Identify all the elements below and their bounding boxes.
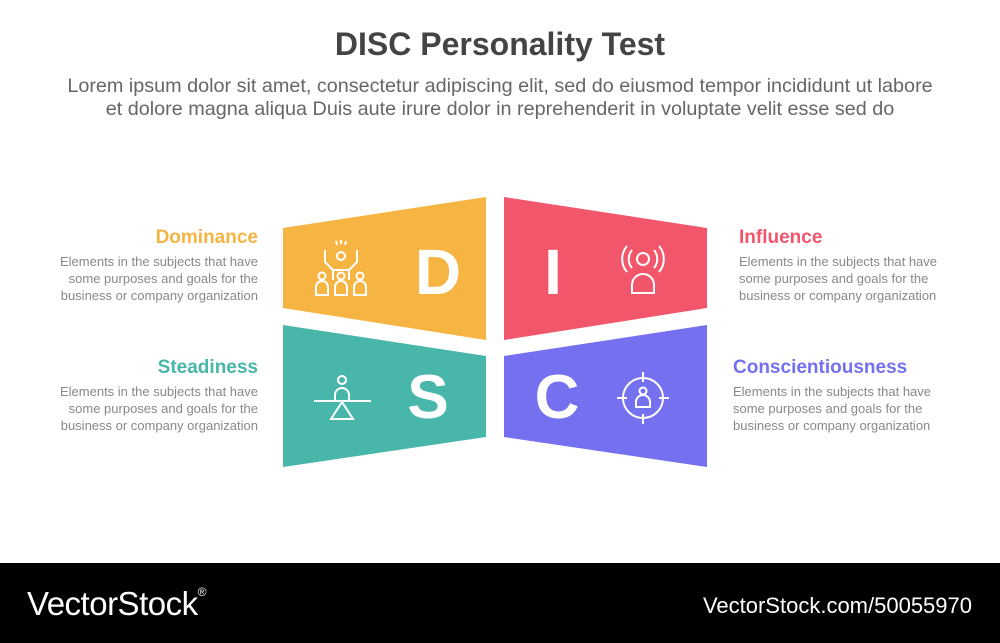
panel I: [504, 197, 707, 340]
panel S: [283, 325, 486, 467]
icon: balance: [314, 376, 371, 419]
text: dominance: some purposes and goals for the: [69, 271, 258, 286]
footer bar: [0, 563, 1000, 643]
text: steadiness: [60, 357, 258, 433]
text: conscientiousness: business or company organization: [733, 418, 930, 433]
panel C: C: [535, 363, 579, 432]
text: conscientiousness: [733, 357, 931, 433]
text: dominance: Elements in the subjects that have: [60, 254, 258, 269]
footer url: VectorStock.com/50055970: [703, 593, 972, 618]
text: dominance: business or company organization: [61, 288, 258, 303]
panel I: I: [544, 236, 562, 308]
subtitle: Lorem ipsum dolor sit amet, consectetur adipiscing elit, sed do eiusmod tempor incididunt ut labore: [67, 75, 933, 97]
panel C: [504, 325, 707, 467]
subtitle: et dolore magna aliqua Duis aute irure dolor in reprehenderit in voluptate velit esse sed do: [106, 98, 894, 120]
panel S: S: [407, 363, 449, 432]
text: steadiness: Steadiness: [158, 357, 258, 378]
title: DISC Personality Test: [335, 26, 665, 62]
panel D: D: [415, 236, 461, 308]
icon: target person: [617, 372, 669, 424]
footer logo: VectorStock®: [27, 585, 206, 622]
panel D: [283, 197, 486, 340]
text: influence: Elements in the subjects that have: [739, 254, 937, 269]
text: influence: some purposes and goals for the: [739, 271, 928, 286]
text: dominance: Dominance: [156, 227, 258, 248]
text: influence: [739, 227, 937, 303]
icon: crowd: [316, 240, 366, 295]
text: dominance: [60, 227, 258, 303]
text: conscientiousness: Elements in the subjects that have: [733, 384, 931, 399]
text: steadiness: business or company organization: [61, 418, 258, 433]
text: steadiness: Elements in the subjects that have: [60, 384, 258, 399]
icon: broadcast person: [622, 246, 664, 293]
text: influence: business or company organization: [739, 288, 936, 303]
text: steadiness: some purposes and goals for the: [69, 401, 258, 416]
subtitle: [67, 75, 933, 120]
text: influence: Influence: [739, 227, 822, 248]
text: conscientiousness: Conscientiousness: [733, 357, 907, 378]
text: conscientiousness: some purposes and goals for the: [733, 401, 922, 416]
